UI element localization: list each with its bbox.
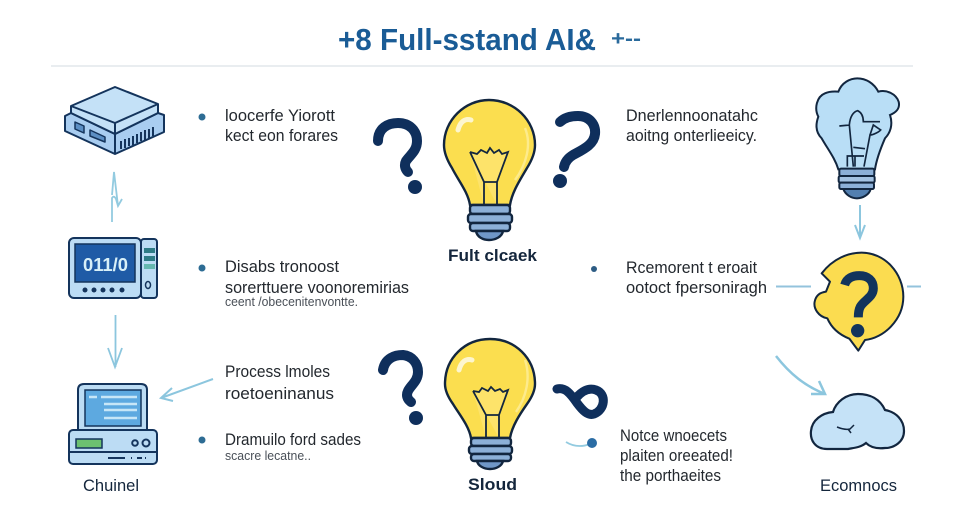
question mark: top right <box>553 116 595 188</box>
text block 3: roetoeninanus <box>225 385 334 403</box>
icon: question bubble <box>814 253 903 351</box>
label: lower bulb: Sloud <box>468 475 517 494</box>
bullet text 4 <box>198 431 361 463</box>
label: computer: Chuinel <box>83 476 139 495</box>
bullet text 4: scacre lecatne.. <box>225 449 311 463</box>
text block: upper right <box>626 107 758 145</box>
icon: server box <box>65 87 164 154</box>
connector lines: question bubble <box>776 286 921 288</box>
question mark: top left <box>378 123 422 194</box>
bullet text 2: sorerttuere voonoremirias <box>225 279 409 297</box>
title: +8 Full-sstand AI& <box>338 22 596 57</box>
arrow: up from monitor to server <box>112 172 122 222</box>
bullet text 4: Dramuilo ford sades <box>225 431 361 449</box>
text block 3 <box>225 363 334 403</box>
bullet text 2: Disabs tronoost <box>225 258 339 276</box>
bullet text 1: loocerfe Yiorott <box>225 107 335 125</box>
arrow: question bubble to cloud <box>776 356 825 394</box>
title: +-- <box>611 28 641 50</box>
icon: blue cloud bulb <box>816 78 899 198</box>
bullet text: lower right <box>566 427 733 485</box>
bullet text: middle right: Rcemorent t eroait <box>626 259 757 277</box>
arrow: blue bulb to question bubble <box>855 205 865 238</box>
bullet text: lower right: plaiten oreeated! <box>620 447 733 465</box>
arrow: text to computer <box>161 379 213 401</box>
question mark: lower right <box>557 389 603 414</box>
icon: computer <box>69 384 157 464</box>
icon: central light bulb <box>444 100 535 240</box>
icon: lower light bulb <box>445 339 535 469</box>
bullet text 1 <box>198 107 338 145</box>
arrow: monitor to computer <box>108 315 122 367</box>
text block: upper right: aoitng onterlieeicy. <box>626 127 757 145</box>
bullet text: middle right <box>591 259 767 297</box>
bullet text 2: ceent /obecenitenvontte. <box>225 295 358 309</box>
bullet text 2 <box>198 258 409 309</box>
bullet text 1: kect eon forares <box>225 127 338 145</box>
text block 3: Process lmoles <box>225 363 330 381</box>
bullet text: lower right: the porthaeites <box>620 467 721 485</box>
label: cloud: Ecomnocs <box>820 476 897 495</box>
label: central bulb: Fult clcaek <box>448 247 538 265</box>
bullet text: lower right: Notce wnoecets <box>620 427 727 445</box>
icon: monitor <box>69 238 157 298</box>
question mark: lower left <box>383 355 423 425</box>
bullet text: middle right: ootoct fpersoniragh <box>626 279 767 297</box>
icon: cloud <box>811 394 904 449</box>
icon: monitor: 011/0 <box>83 255 128 275</box>
text block: upper right: Dnerlennoonatahc <box>626 107 758 125</box>
